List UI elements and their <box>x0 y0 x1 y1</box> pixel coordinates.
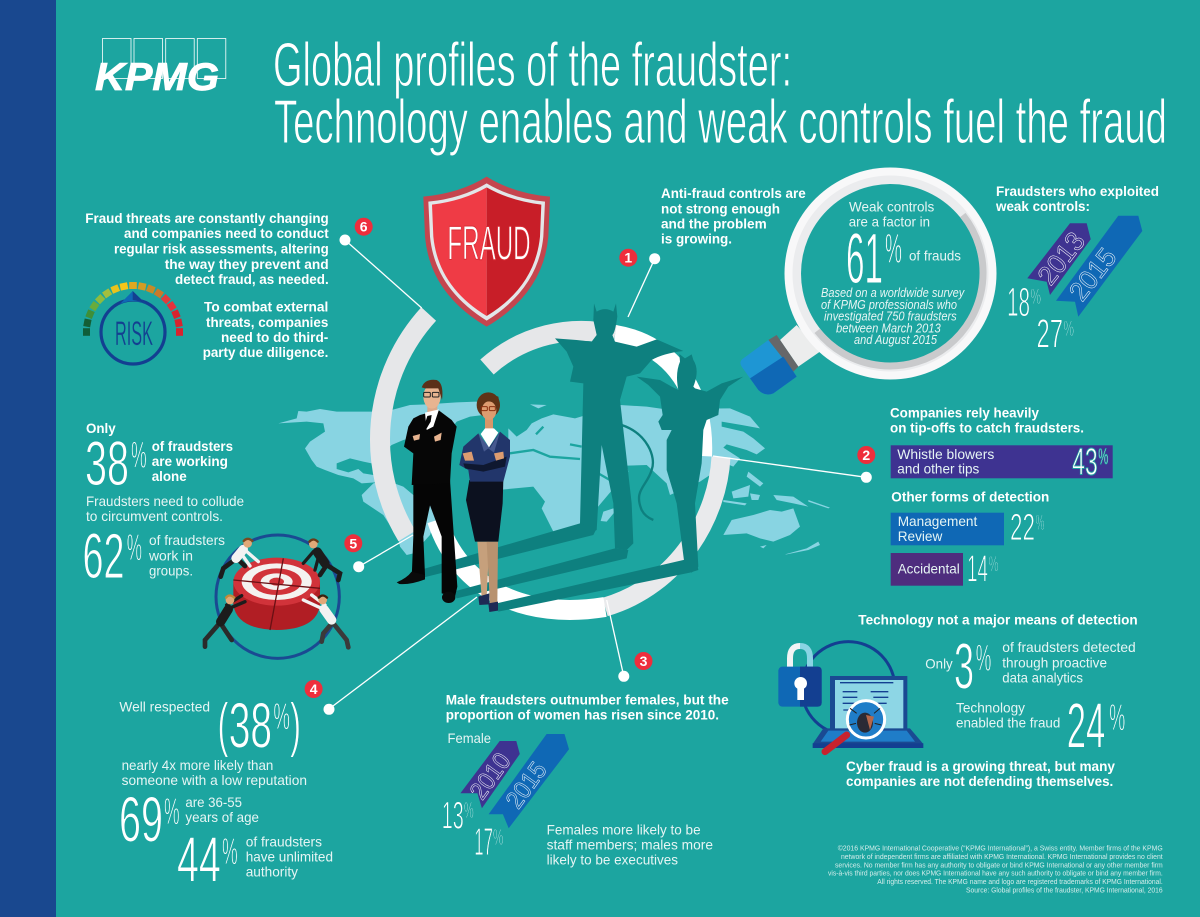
padlock <box>778 646 822 707</box>
text block: male vs female fraudsters: likely to be executives <box>547 851 678 867</box>
ribbon 2015 female <box>489 734 569 828</box>
magnifying glass: weak controls 61%: of KPMG professionals who <box>821 298 957 312</box>
shadow: male devil <box>555 303 683 550</box>
text block: well respected: % <box>273 696 290 738</box>
text block: technology and detection: % <box>976 638 991 680</box>
text block: anti-fraud controls: is growing. <box>661 230 732 246</box>
KPMG logo: KPMG <box>95 56 219 99</box>
footer legal text: All rights reserved. The KPMG name and logo are registered trademarks of KPMG International. <box>877 879 1163 886</box>
ribbon 2010: 2010 <box>465 748 517 805</box>
bar: whistle blowers <box>891 441 1113 483</box>
ribbon 2015 <box>1056 216 1142 317</box>
text block: technology and detection: 3 <box>954 630 974 703</box>
text block: well respected: % <box>222 831 238 873</box>
text block and bars: detection methods: % <box>1036 510 1044 535</box>
text block: male vs female fraudsters: Females more likely to be <box>547 821 701 837</box>
marker 2 <box>857 446 875 483</box>
text block: working alone: % <box>131 435 147 477</box>
magnifying glass: weak controls 61%: investigated 750 fraudsters <box>824 310 957 324</box>
text block: risk assessments: regular risk assessments, altering <box>114 241 329 257</box>
devil tail <box>622 425 653 520</box>
text block: risk assessments: party due diligence. <box>203 344 328 360</box>
text block: well respected <box>119 689 333 896</box>
text block: working alone: work in <box>148 548 193 564</box>
text block: well respected: someone with a low reputation <box>122 772 307 788</box>
text block: male vs female fraudsters: Female <box>448 730 491 746</box>
text block: male vs female fraudsters: staff members; males more <box>547 836 713 852</box>
text block: male vs female fraudsters: % <box>464 797 474 823</box>
ribbon 2015 female: 2015 <box>501 757 553 814</box>
text block: risk assessments: need to do third- <box>221 329 329 345</box>
text block: technology and detection: Cyber fraud is a growing threat, but many <box>846 758 1115 774</box>
world map <box>278 402 830 555</box>
magnifier with bug <box>825 701 885 752</box>
bar: accidental: 14 <box>967 549 988 591</box>
text block: well respected: have unlimited <box>246 849 333 865</box>
magnifying glass: weak controls 61%: are a factor in <box>849 214 930 230</box>
icon: risk gauge <box>83 282 183 364</box>
red fraud shield <box>423 177 550 327</box>
text block: risk assessments: the way they prevent and <box>165 256 329 272</box>
text block: well respected: authority <box>246 864 298 880</box>
footer legal text: ©2016 KPMG International Cooperative (“KPMG International”), a Swiss entity. Member firms of the KPMG <box>838 845 1163 853</box>
marker 5: 5 <box>349 535 357 551</box>
text block: well respected: 38 <box>229 689 272 761</box>
magnifying glass: weak controls 61%: Weak controls <box>849 199 934 215</box>
magnifying glass: weak controls 61%: % <box>885 225 902 272</box>
text block: male vs female fraudsters: proportion of women has risen since 2010. <box>446 706 719 722</box>
ribbon 2015: 2015 <box>1063 242 1123 307</box>
icon: padlock and laptop with bug <box>778 642 923 752</box>
text block: risk assessments: detect fraud, as needed. <box>175 271 329 287</box>
text block: working alone: Only <box>86 420 116 436</box>
fraudsters who exploited weak controls: 18 <box>1007 279 1030 325</box>
marker 1: 1 <box>624 250 632 266</box>
icon: people assembling a target <box>205 535 348 658</box>
text block: well respected: ( <box>218 691 229 758</box>
left blue band <box>0 0 56 917</box>
person top left <box>221 539 258 577</box>
bar: accidental <box>891 549 998 591</box>
text block: technology and detection: data analytics <box>1002 670 1083 686</box>
bar: accidental: Accidental <box>898 560 960 576</box>
text block: anti-fraud controls: and the problem <box>661 215 767 231</box>
bar: whistle blowers: % <box>1098 444 1108 469</box>
text block: anti-fraud controls <box>661 185 806 246</box>
text block: working alone: Fraudsters need to collude <box>86 493 244 509</box>
text block: risk assessments: To combat external <box>204 299 328 315</box>
marker 4 <box>305 680 334 715</box>
bar: whistle blowers: Whistle blowers <box>897 446 994 462</box>
text block: risk assessments: and companies need to conduct <box>124 225 329 241</box>
text block: working alone: groups. <box>149 563 193 579</box>
Americas <box>278 402 483 555</box>
laptop <box>813 676 923 748</box>
text block: well respected: 44 <box>177 824 221 896</box>
text block: working alone: 38 <box>85 429 129 499</box>
magnifying glass: weak controls 61%: of frauds <box>909 248 961 264</box>
text block: well respected: are 36-55 <box>185 794 242 810</box>
devil shadows of the fraudsters <box>420 303 743 612</box>
Eurasia, Africa, Oceania <box>480 404 830 554</box>
text block and bars: detection methods: Companies rely heavily <box>890 404 1039 420</box>
text block: male vs female fraudsters: Male fraudsters outnumber females, but the <box>446 691 729 707</box>
footer legal text <box>828 845 1163 894</box>
magnifying glass: weak controls 61%: 61 <box>846 220 883 299</box>
bar: management review: Management <box>898 513 977 529</box>
text block: technology and detection: % <box>1109 697 1125 739</box>
text block: well respected: ) <box>290 691 301 758</box>
text block: technology and detection: Technology <box>956 700 1025 716</box>
magnifying glass: weak controls 61%: between March 2013 <box>836 322 941 336</box>
marker 3: 3 <box>640 653 648 669</box>
magnifier handle <box>740 325 820 394</box>
text block: technology and detection: through proactive <box>1002 654 1107 670</box>
marker 1 <box>619 249 660 267</box>
text block: working alone: 62 <box>82 520 124 592</box>
magnifying glass: weak controls 61%: Based on a worldwide survey <box>821 286 965 300</box>
text block: technology and detection <box>846 612 1138 789</box>
fraudsters who exploited weak controls: 27 <box>1036 311 1063 357</box>
ribbon 2013: 2013 <box>1032 226 1091 291</box>
footer legal text: network of independent firms are affiliated with KPMG International. KPMG International provides no client <box>841 854 1163 861</box>
text block and bars: detection methods: on tip-offs to catch fraudsters. <box>890 420 1084 436</box>
fraudsters who exploited weak controls: Fraudsters who exploited <box>996 183 1159 199</box>
person top right <box>303 539 340 580</box>
footer legal text: services. No member firm has any authority to obligate or bind KPMG International or any other member firm <box>835 862 1163 869</box>
icon: risk gauge: RISK <box>115 315 153 353</box>
text block: male vs female fraudsters: % <box>493 824 503 850</box>
text block and bars: detection methods: % <box>989 552 998 577</box>
marker 4: 4 <box>310 681 318 697</box>
marker 5 <box>344 534 364 572</box>
bar: whistle blowers: and other tips <box>897 461 979 477</box>
text block and bars: detection methods: Other forms of detection <box>891 489 1049 505</box>
magnifying glass: weak controls 61% <box>740 168 996 394</box>
text block: risk assessments: Fraud threats are constantly changing <box>85 210 329 226</box>
text block: technology and detection: Technology not a major means of detection <box>858 612 1138 628</box>
text block: male vs female fraudsters: 13 <box>442 794 464 837</box>
text block: working alone: of fraudsters <box>149 532 225 548</box>
text block: male vs female fraudsters: 17 <box>474 821 493 864</box>
text block: working alone: are working <box>152 453 228 469</box>
KPMG logo <box>95 38 226 99</box>
shadow: female devil <box>637 354 743 573</box>
marker 6 <box>340 218 373 246</box>
text block: anti-fraud controls: Anti-fraud controls are <box>661 185 806 201</box>
bar: whistle blowers: 43 <box>1072 441 1098 483</box>
woman in navy suit <box>459 392 510 612</box>
marker 2: 2 <box>862 447 870 463</box>
floor shadows <box>420 523 597 578</box>
callout lines and numbered markers <box>305 218 875 715</box>
magnifying glass: weak controls 61%: and August 2015 <box>854 333 937 347</box>
text block: well respected: 69 <box>119 784 163 856</box>
footer legal text: Source: Global profiles of the fraudster, KPMG International, 2016 <box>966 887 1163 894</box>
marker 3 <box>618 652 652 682</box>
text block: technology and detection: enabled the fraud <box>956 715 1060 731</box>
connector lines <box>329 240 866 709</box>
marker 6: 6 <box>360 219 368 235</box>
text block: technology and detection: companies are not defending themselves. <box>846 773 1113 789</box>
text block: working alone <box>82 420 244 592</box>
text block: well respected: % <box>164 791 180 833</box>
text block: technology and detection: Only <box>925 656 953 672</box>
red fraud shield: FRAUD <box>447 216 531 270</box>
text block: working alone: of fraudsters <box>152 438 233 454</box>
man in black suit <box>397 380 457 603</box>
bar: management review <box>891 507 1044 549</box>
person bottom right <box>303 595 348 647</box>
text block: well respected: years of age <box>185 809 259 825</box>
title: Global profiles of the fraudster: <box>273 31 792 100</box>
text block: well respected: of fraudsters <box>246 834 322 850</box>
text block: well respected: Well respected <box>119 699 210 715</box>
text block: working alone: to circumvent controls. <box>86 508 223 524</box>
text block: well respected: nearly 4x more likely than <box>122 757 273 773</box>
fraudsters who exploited weak controls: % <box>1064 316 1074 341</box>
text block: technology and detection: 24 <box>1067 690 1105 762</box>
text block: male vs female fraudsters <box>442 691 729 867</box>
fraudsters who exploited weak controls: % <box>1030 284 1041 309</box>
fraudsters who exploited weak controls: weak controls: <box>995 198 1090 214</box>
footer legal text: vis-à-vis third parties, nor does KPMG International have any such authority to obligate or bind any member firm. <box>828 871 1163 878</box>
text block: risk assessments: threats, companies <box>206 314 328 330</box>
text block and bars: detection methods <box>890 404 1113 591</box>
bar: management review: 22 <box>1010 507 1035 549</box>
bar: management review: Review <box>898 528 943 544</box>
person bottom left <box>205 595 245 647</box>
fraudsters who exploited weak controls <box>995 183 1159 357</box>
text block: anti-fraud controls: not strong enough <box>661 200 780 216</box>
text block: technology and detection: of fraudsters detected <box>1002 639 1136 655</box>
central ring <box>380 314 721 610</box>
text block: working alone: % <box>127 527 142 569</box>
title <box>273 31 1167 157</box>
text block: risk assessments <box>85 210 329 360</box>
text block: working alone: alone <box>152 468 187 484</box>
